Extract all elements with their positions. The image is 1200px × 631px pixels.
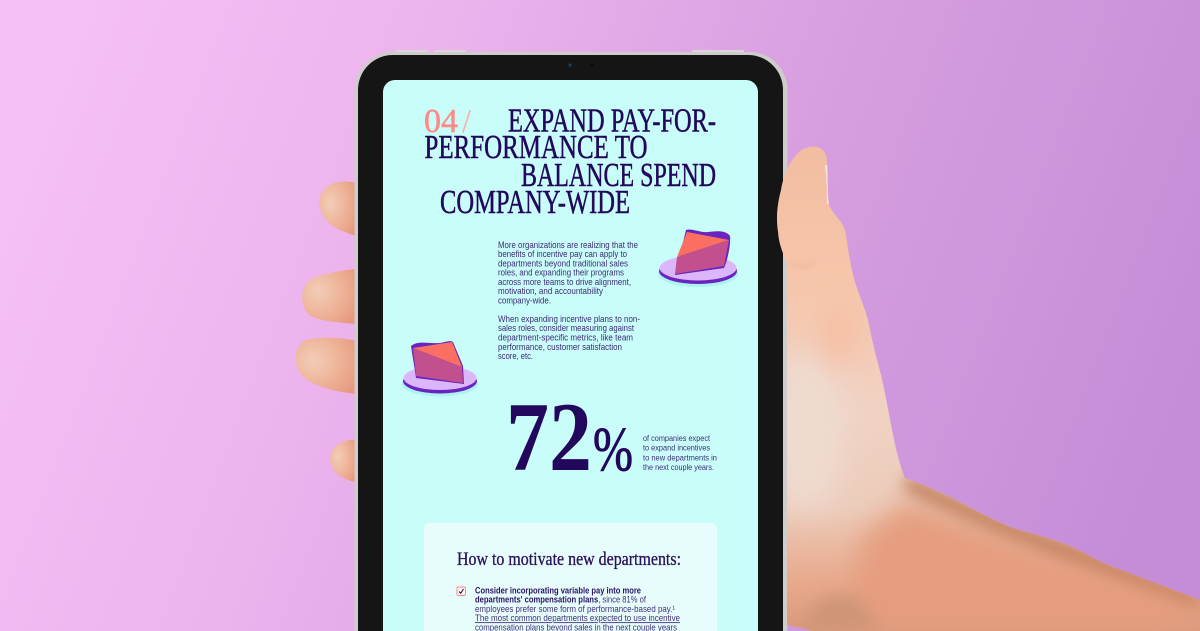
screen content — [402, 102, 738, 631]
list item text: departments' compensation plans, since 81% of — [475, 595, 646, 605]
intro text: More organizations are realizing that the — [498, 240, 638, 250]
intro text: benefits of incentive pay can apply to — [498, 249, 627, 259]
icon: cake slice left — [402, 341, 478, 396]
intro text: When expanding incentive plans to non- — [498, 314, 640, 324]
title: BALANCE SPEND — [521, 157, 716, 194]
stat caption: the next couple years. — [643, 463, 714, 472]
tablet buttons — [396, 50, 744, 54]
fingers behind tablet — [295, 182, 356, 482]
hand with thumb and arm — [765, 140, 1200, 631]
screen — [383, 80, 758, 631]
icon: checkbox — [457, 587, 466, 596]
thumbnail — [826, 165, 828, 204]
list item text — [475, 586, 680, 631]
tablet body — [354, 52, 788, 631]
list item text: employees prefer some form of performance-based pay.¹ — [475, 604, 675, 614]
list item text: Consider incorporating variable pay into more — [475, 586, 641, 596]
intro text: department-specific metrics, like team — [498, 332, 633, 342]
stat caption: to expand incentives — [643, 444, 710, 453]
stat caption: to new departments in — [643, 453, 717, 462]
panel heading: How to motivate new departments: — [457, 549, 681, 570]
title: EXPAND PAY-FOR- — [508, 102, 716, 140]
intro text: company-wide. — [498, 295, 551, 305]
stat caption: of companies expect — [643, 434, 711, 443]
intro text: sales roles, consider measuring against — [498, 323, 634, 333]
title: COMPANY-WIDE — [440, 184, 630, 221]
camera — [567, 62, 593, 68]
thumb crease — [790, 262, 815, 266]
intro text: across more teams to drive alignment, — [498, 277, 631, 287]
intro text: roles, and expanding their programs — [498, 268, 625, 278]
icon: cake slice right — [658, 230, 738, 287]
palm highlight — [787, 348, 844, 511]
intro text — [498, 240, 640, 361]
thumb base tone — [822, 305, 854, 365]
tablet — [354, 50, 788, 631]
section number: / — [462, 103, 472, 140]
title — [425, 109, 716, 214]
arm base — [850, 492, 1128, 602]
section number: 04 — [424, 103, 458, 140]
arm upper shading — [905, 474, 1200, 606]
list item text: The most common departments expected to use incentive — [475, 613, 680, 623]
intro text: performance, customer satisfaction — [498, 342, 622, 352]
title: PERFORMANCE TO — [424, 129, 648, 166]
panel: how to motivate — [424, 523, 717, 631]
big stat 72%: % — [593, 416, 633, 484]
section number — [425, 110, 471, 133]
big stat 72%: 72 — [506, 383, 592, 492]
wrist crease shadow — [805, 594, 874, 631]
intro text: motivation, and accountability — [498, 286, 604, 296]
intro text: departments beyond traditional sales — [498, 258, 629, 268]
intro text: score, etc. — [498, 351, 533, 361]
big stat 72% — [510, 404, 632, 472]
stat caption — [643, 434, 717, 472]
